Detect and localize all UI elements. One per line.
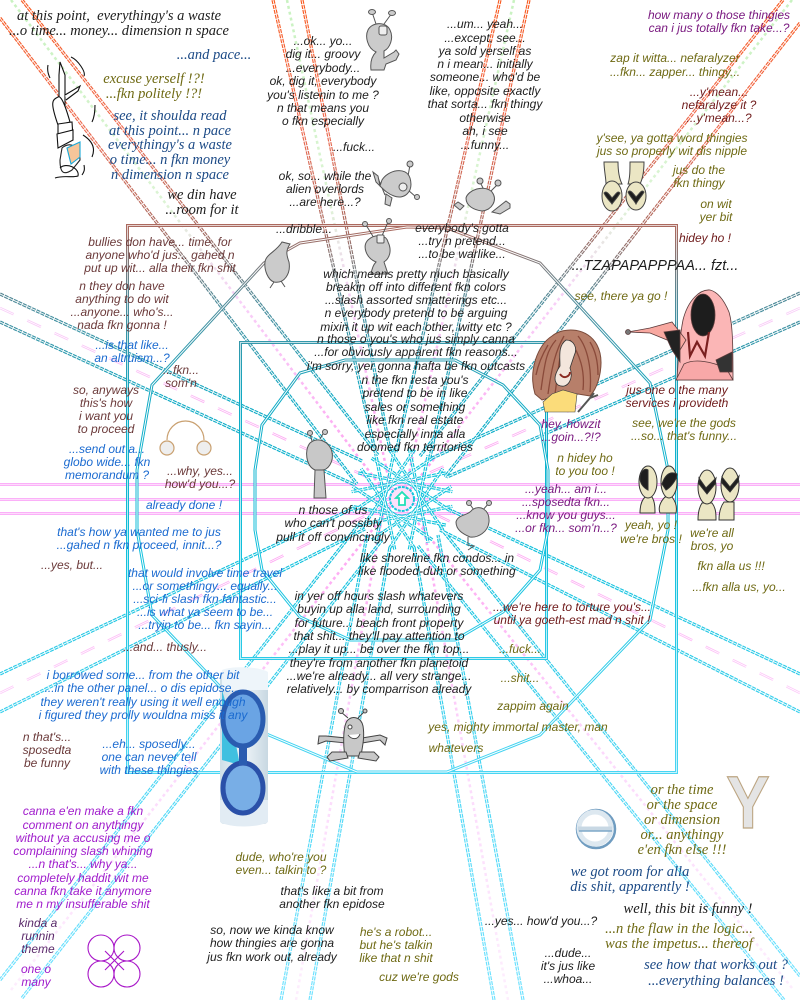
- text: so anyways: this's how: [80, 396, 133, 410]
- text: n hidey ho: to you too !: [555, 464, 615, 478]
- text: we're all bros: we're all: [690, 526, 734, 540]
- text: hidey ho: hidey ho !: [679, 231, 732, 245]
- icon: swimming goggles in tube: [220, 667, 268, 826]
- text: see it shoulda read: n dimension n space: [111, 167, 230, 183]
- text: excuse yerself: ...fkn politely !?!: [106, 86, 202, 102]
- text: n those of us: who can't possibly: [284, 516, 382, 530]
- text: central paragraph: ...slash assorted smatterings etc...: [325, 293, 507, 307]
- text: at this point: ...o time... money... dimension n space: [9, 23, 229, 39]
- text: excuse yerself: excuse yerself !?!: [103, 71, 205, 87]
- text: see we're the gods: see, we're the gods: [632, 416, 736, 430]
- text: and thusly: ...and... thusly...: [123, 640, 207, 654]
- text: canna e'en: without ya accusing me o: [16, 831, 151, 845]
- text: um yeah: otherwise: [459, 111, 511, 125]
- text: dude whoa: it's jus like: [541, 959, 595, 973]
- text: ok so alien overlords: ok, so... while the: [279, 169, 372, 183]
- text: see it shoulda read: o time... n fkn money: [110, 152, 231, 168]
- text: dude whoa: ...whoa...: [544, 972, 592, 986]
- text: fkn som'n: som'n: [165, 376, 197, 390]
- icon: grey alien centre left: [307, 430, 332, 498]
- text: ok yo: dig it... groovy: [286, 47, 361, 61]
- text: or the time: or the space: [647, 797, 718, 813]
- text: so anyways: to proceed: [78, 422, 135, 436]
- text: central paragraph: ...for obviously apparent fkn reasons...: [314, 345, 518, 359]
- text: hey howzit: ...goin...?!?: [541, 430, 601, 444]
- text: fkn alla us yo: ...fkn alla us, yo...: [692, 580, 786, 594]
- text: um yeah: n i mean... initially: [437, 57, 534, 71]
- text: ok so alien overlords: ...are here...?: [289, 195, 361, 209]
- text: we din have: ...room for it: [165, 202, 240, 218]
- text: see how that works out: see how that works out ?: [644, 957, 789, 973]
- text: we din have: we din have: [167, 187, 237, 203]
- text: one o many: many: [21, 975, 52, 989]
- text: time travel: ...or somethingy... equally...: [133, 579, 277, 593]
- text: canna e'en: complaining slash whining: [13, 844, 153, 858]
- text: zap it witta: ...fkn... zapper... thingy...: [610, 65, 740, 79]
- icon: quatrefoil circles: [88, 935, 140, 987]
- text: dude who're you: dude, who're you: [235, 850, 327, 864]
- text: central paragraph: mixin it up wit each other, witty etc ?: [320, 320, 512, 334]
- text: central paragraph: doomed fkn territories: [357, 440, 473, 454]
- text: in yer off hours: relatively... by comparrison already: [287, 682, 472, 696]
- icon: grey alien upside down left: [265, 242, 290, 288]
- text: n they don have: nada fkn gonna !: [77, 318, 167, 332]
- text: dude who're you: even... talkin to ?: [236, 863, 327, 877]
- text: see we're the gods: ...so... that's funny...: [631, 429, 737, 443]
- text: canna e'en: completely haddit wit me: [17, 871, 149, 885]
- text: i borrowed some: they weren't really using it well enough: [40, 695, 246, 709]
- text: ok yo: you's listenin to me ?: [266, 88, 379, 102]
- icon: pale aliens upside down: [602, 162, 646, 211]
- text: ok yo: o fkn especially: [282, 114, 365, 128]
- text: in yer off hours: ...we're already... all very strange...: [287, 669, 471, 683]
- text: y'see word thingies: jus so properly wit dis nipple: [595, 144, 747, 158]
- text: jus one o the many: services i provideth: [626, 396, 729, 410]
- text: olive shit: ...shit...: [501, 671, 539, 685]
- text: yes how'd you: ...yes... how'd you...?: [485, 914, 597, 928]
- text: time travel: ...is what ya seem to be...: [137, 605, 273, 619]
- text: central paragraph: sales or something: [365, 400, 466, 414]
- text: eh sposedly: one can never tell: [102, 750, 197, 764]
- icon: pale aliens group one: [639, 466, 677, 513]
- text: n those of us: n those of us: [299, 503, 367, 517]
- text: torture: until ya goeth-est mad n shit !: [494, 613, 651, 627]
- text: we got room: we got room for alla: [571, 864, 689, 880]
- text: on wit: yer bit: [699, 210, 733, 224]
- text: time travel: that would involve time travel: [128, 566, 282, 580]
- text: eh sposedly: ...eh... sposedly...: [102, 737, 196, 751]
- text: i borrowed some: ...in the other panel... o dis epidose...: [45, 681, 241, 695]
- outer frame rectangle: [128, 226, 676, 772]
- text: a bit from another epidose: another fkn epidose: [279, 897, 385, 911]
- text: see it shoulda read: see, it shoulda read: [113, 108, 227, 124]
- text: whatevers: whatevers: [429, 741, 483, 755]
- text: central paragraph: especially inna alla: [365, 427, 466, 441]
- text: kinda a runnin theme: kinda a: [19, 916, 58, 930]
- text: time travel: ...sci-fi slash fkn fantastic...: [133, 592, 277, 606]
- icon: letter Y: Y: [726, 761, 770, 844]
- text: tzapapapppaa: ...TZAPAPAPPPAA... fzt...: [572, 258, 738, 274]
- text: zappim again: zappim again: [496, 699, 569, 713]
- text: fuck: ...fuck...: [333, 140, 375, 154]
- text: or the time: or the time: [651, 782, 714, 798]
- inner frame rectangle: [240, 342, 546, 658]
- icon: grey alien centre right: [456, 500, 492, 550]
- text: ok yo: ok, dig it, everybody: [270, 74, 377, 88]
- text: hey howzit: hey, howzit: [541, 417, 601, 431]
- text: um yeah: ah, i see: [462, 124, 508, 138]
- text: y'mean: ...y'mean...: [690, 85, 748, 99]
- icon: grey alien at frame top: [362, 218, 392, 274]
- text: ok yo: ...ok... yo...: [294, 34, 352, 48]
- text: he's a robot: like that n shit: [359, 951, 433, 965]
- text: everybody's gotta: ...try n pretend...: [418, 234, 506, 248]
- text: in yer off hours: ...play it up... be over the fkn top...: [289, 642, 469, 656]
- text: we got room: dis shit, apparently !: [570, 879, 690, 895]
- icon: long-haired man: [533, 330, 601, 412]
- horizontal pink lines: [0, 484, 800, 514]
- icon: hand holding candle upside down: [48, 57, 95, 178]
- text: in yer off hours: that shit... they'll pay attention to: [293, 629, 465, 643]
- icon: grey alien tumbling right: [454, 178, 510, 214]
- text: in yer off hours: buyin up alla land, surrounding: [297, 602, 461, 616]
- text: bullies: bullies don have... time, for: [88, 235, 233, 249]
- text: so anyways: i want you: [79, 409, 133, 423]
- text: at this point: at this point, everythingy's a waste: [17, 8, 222, 24]
- text: everybody's gotta: everybody's gotta: [415, 221, 509, 235]
- text: central paragraph: n those o you's who jus simply canna: [317, 332, 515, 346]
- text: central paragraph: n everybody pretend to be arguing: [325, 306, 508, 320]
- text: um yeah: ...um... yeah...: [447, 17, 523, 31]
- text: he's a robot: he's a robot...: [360, 925, 432, 939]
- text: canna e'en: me n my insufferable shit: [16, 897, 150, 911]
- text: um yeah: someone... who'd be: [430, 70, 540, 84]
- text: in yer off hours: they're from another fkn planetoid: [290, 656, 469, 670]
- text: eh sposedly: with these thingies: [100, 763, 198, 777]
- text: yeah am i: ...yeah... am i...: [525, 482, 607, 496]
- text: or the time: e'en fkn else !!!: [638, 842, 727, 858]
- text: um yeah: ...except, see...: [444, 31, 526, 45]
- text: a bit from another epidose: that's like a bit from: [280, 884, 384, 898]
- text: ok yo: n that means you: [277, 101, 369, 115]
- text: central paragraph: pretend to be in like: [362, 386, 468, 400]
- text: dude whoa: ...dude...: [545, 946, 591, 960]
- text: and pace: ...and pace...: [177, 47, 251, 63]
- text: ok yo: ...everybody...: [286, 61, 360, 75]
- text: central paragraph: which means pretty much basically: [323, 267, 510, 281]
- text: send out a: memorandum ?: [65, 468, 149, 482]
- text: in yer off hours: in yer off hours slash whatevers: [295, 589, 463, 603]
- text: um yeah: ya sold yerself as: [438, 44, 531, 58]
- text: canna e'en: canna e'en make a fkn: [23, 804, 144, 818]
- text: send out a: globo wide... fkn: [64, 455, 151, 469]
- text: yeah am i: ...sposedta fkn...: [522, 495, 610, 509]
- text: everybody's gotta: ...to be warlike...: [418, 247, 506, 261]
- text: um yeah: ...funny...: [461, 138, 509, 152]
- text: sposedta be funny: be funny: [24, 756, 71, 770]
- text: ok so alien overlords: alien overlords: [286, 182, 364, 196]
- text: olive fuck: ...fuck...: [499, 642, 541, 656]
- text: um yeah: that sorta... fkn thingy: [428, 97, 543, 111]
- text: so now we kinda know: jus fkn work out, already: [205, 950, 338, 964]
- text: or the time: or dimension: [644, 812, 720, 828]
- text: on wit: on wit: [700, 197, 732, 211]
- text: n those of us: pull it off convincingly: [275, 530, 391, 544]
- text: y'mean: ...y'mean...?: [686, 111, 752, 125]
- text: send out a: ...send out a...: [69, 442, 145, 456]
- central star with rings and arrow: [352, 449, 452, 549]
- text: i borrowed some: i figured they prolly wouldna miss it any: [39, 708, 248, 722]
- text: central paragraph: like fkn real estate: [367, 413, 464, 427]
- text: or the time: or... anythingy: [641, 827, 724, 843]
- text: kinda a runnin theme: theme: [21, 942, 55, 956]
- text: yeah am i: ...know you guys...: [516, 508, 616, 522]
- text: why yes: ...why, yes...: [167, 464, 233, 478]
- text: central paragraph: i'm sorry, yer gonna hafta be fkn outcasts: [307, 359, 525, 373]
- text: see it shoulda read: at this point... n pace: [109, 123, 232, 139]
- text: kinda a runnin theme: runnin: [21, 929, 55, 943]
- text: in yer off hours: for future... beach front property: [295, 616, 464, 630]
- text: fkn alla us: fkn alla us !!!: [697, 559, 765, 573]
- text: sposedta be funny: n that's...: [23, 730, 71, 744]
- text: y'mean: nefaralyze it ?: [682, 98, 757, 112]
- text: jus do the: fkn thingy: [673, 176, 726, 190]
- text: he's a robot: but he's talkin: [359, 938, 433, 952]
- text: n they don have: anything to do wit: [75, 292, 169, 306]
- text: flaw in the logic: ...n the flaw in the logic...: [605, 921, 753, 937]
- text: we're all bros: bros, yo: [691, 539, 734, 553]
- text: how many o those thingies: can i jus totally fkn take...?: [649, 21, 790, 35]
- text: cuz we're gods: cuz we're gods: [379, 970, 459, 984]
- text: already done: already done !: [146, 498, 223, 512]
- text: see it shoulda read: everythingy's a waste: [108, 137, 233, 153]
- text: dribble: ...dribble...: [276, 222, 332, 236]
- outer octagon: [137, 227, 668, 772]
- text: i borrowed some: i borrowed some... from the other bit: [47, 668, 240, 682]
- text: bullies: anyone who'd jus... gahed n: [85, 248, 235, 262]
- text: canna e'en: ...n that's... why ya...: [28, 857, 138, 871]
- text: flaw in the logic: was the impetus... thereof: [605, 936, 755, 952]
- text: n hidey ho: n hidey ho: [557, 451, 613, 465]
- text: torture: ...we're here to torture you's...: [493, 600, 651, 614]
- text: y'see word thingies: y'see, ya gotta word thingies: [595, 131, 748, 145]
- icon: grey alien top: [367, 10, 399, 70]
- text: n they don have: ...anyone... who's...: [70, 305, 174, 319]
- text: yes but: ...yes, but...: [41, 558, 103, 572]
- text: one o many: one o: [21, 962, 51, 976]
- text: sposedta be funny: sposedta: [23, 743, 72, 757]
- text: so now we kinda know: so, now we kinda know: [210, 923, 335, 937]
- inner octagon: [255, 360, 548, 640]
- text: yeah yo: yeah, yo !: [624, 518, 678, 532]
- text: central paragraph: n the fkn resta you's: [361, 373, 469, 387]
- text: so now we kinda know: how thingies are gonna: [210, 936, 334, 950]
- text: shoreline condos: like flooded-duh or something: [358, 564, 516, 578]
- icon: headphones shape: [160, 421, 211, 455]
- text: that's how ya wanted: that's how ya wanted me to jus: [57, 525, 221, 539]
- text: altruism: ...is that like...: [95, 338, 169, 352]
- text: shoreline condos: like shoreline fkn condos... in: [360, 551, 514, 565]
- text: yeah yo: we're bros !: [620, 532, 682, 546]
- text: how many o those thingies: how many o those thingies: [648, 8, 790, 22]
- icon: pale aliens group two: [698, 468, 739, 520]
- text: canna e'en: canna fkn take it anymore: [14, 884, 152, 898]
- icon: circled symbol: [577, 810, 615, 848]
- text: well this bit is funny: well, this bit is funny !: [624, 901, 753, 917]
- text: time travel: ...tryin to be... fkn sayin...: [138, 618, 272, 632]
- text: see there ya go: see, there ya go !: [575, 289, 668, 303]
- text: so anyways: so, anyways: [73, 383, 139, 397]
- icon: grey alien tumbling left: [373, 161, 420, 206]
- text: bullies: put up wit... alla their fkn shit: [83, 261, 236, 275]
- text: jus one o the many: jus one o the many: [624, 383, 729, 397]
- text: central paragraph: breakin off into different fkn colors: [326, 280, 506, 294]
- text: yeah am i: ...or fkn... som'n...?: [515, 521, 617, 535]
- text: see how that works out: ...everything balances !: [648, 973, 784, 989]
- text: why yes: how'd you...?: [165, 477, 235, 491]
- text: mighty immortal master: yes, mighty immortal master, man: [427, 720, 608, 734]
- text: that's how ya wanted: ...gahed n fkn proceed, innit...?: [57, 538, 222, 552]
- icon: sitting alien: [318, 708, 387, 761]
- text: altruism: an altruism...?: [94, 351, 170, 365]
- text: zap it witta: zap it witta... nefaralyzer: [609, 51, 741, 65]
- text: um yeah: like, opposite exactly: [430, 84, 541, 98]
- text: fkn som'n: ...fkn...: [163, 363, 199, 377]
- text: canna e'en: comment on anythingy: [23, 818, 144, 832]
- text: jus do the: jus do the: [671, 163, 725, 177]
- text: n they don have: n they don have: [79, 279, 165, 293]
- icon: pink hooded figure with zapper: [626, 290, 733, 380]
